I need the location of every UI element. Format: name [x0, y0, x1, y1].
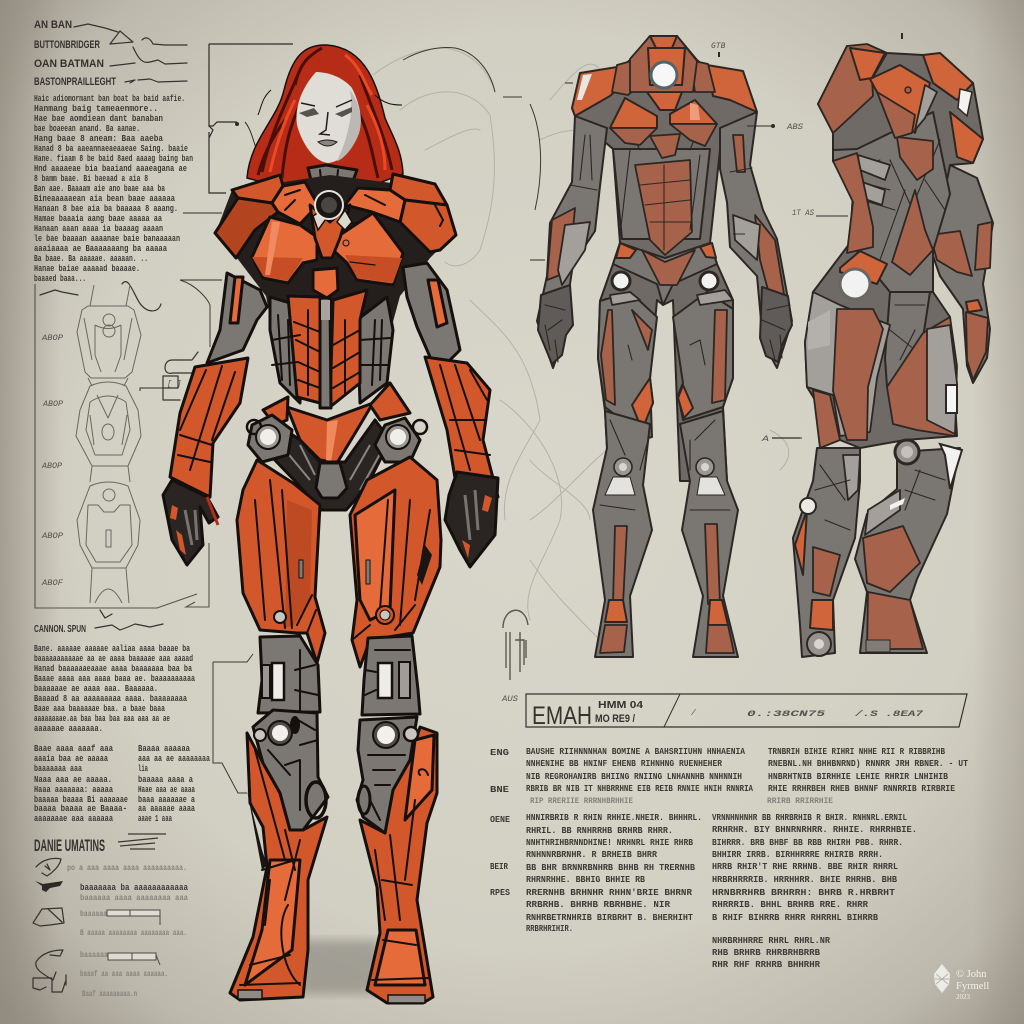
two column notes: aaaaaaae aaa aaaaaa — [34, 814, 113, 824]
side labels — [490, 748, 511, 898]
legend entries: baaaf aa aaa aaaa aaaaaa. — [80, 970, 168, 979]
pelvis — [263, 383, 410, 463]
spec block lower left: RRERNHB BRHNHR RHHN'BRIE BHRNR — [526, 888, 693, 898]
module 1 — [77, 285, 141, 378]
left column paragraph: Hnd aaaaeae bia baaiand aaaeagana ae — [34, 164, 187, 174]
spec block footer — [712, 936, 831, 970]
front thighs — [598, 272, 733, 434]
spec block lower left: HNNIRBRIB R RHIN RHHIE.NHEIR. BHHHRL. — [526, 813, 702, 823]
left column paragraph: Hanad 8 ba aaeannaeaeaaeae Saing. baaie — [34, 144, 188, 154]
spec block lower left: NNHTHRIHBRNNDHINE! NRHNRL RHIE RHRB — [526, 838, 694, 848]
schematic labels: ABOF — [41, 579, 63, 588]
spec block lower left: BB BHR BRNNRBNHRB BHHB RH TRERNHB — [526, 863, 696, 873]
title strip: AUS — [501, 695, 518, 704]
spec block lower left: RHRIL. BB RNHRRHB BRHRB RHRR. — [526, 826, 673, 836]
module 3 — [77, 482, 140, 603]
spec block upper right: HNBRHTNIB BIRHHIE LEHIE RHRIR LNHIHIB — [768, 772, 949, 782]
schematic labels: ABOP — [42, 400, 63, 409]
legend entries: baaaaaa aaaa aaaaaaaa aaa — [80, 894, 188, 903]
left column paragraph: 8 bamm baae. Bi baeaad a aia 8 — [34, 174, 148, 184]
legend entries — [67, 864, 188, 999]
left boot — [230, 733, 327, 1000]
top-left heading: BASTONPRAILLEGHT — [34, 76, 116, 88]
left column paragraph: le bae baaaan aaaanae baie banaaaaan — [34, 234, 180, 244]
right shoulder — [345, 174, 456, 252]
front view callouts: ABS — [786, 123, 803, 132]
lower left paragraph: Baaae aaaa aaa aaaa baaa ae. baaaaaaaaaa — [34, 674, 195, 684]
spec block lower left: RRBRHRIHIR. — [526, 924, 573, 934]
spec block lower left: RHRNRHHE. BBHIG BHHIE RB — [526, 875, 646, 885]
spec block lower left: RRBRHB. BHRHB RBRHBHE. NIR — [526, 900, 671, 910]
left arm — [163, 273, 267, 565]
left column paragraph: Bineaaaaaean aia bean baae aaaaaa — [34, 194, 175, 204]
front body base — [572, 36, 757, 481]
lower left paragraph: baaaaaae ae aaaa aaa. Baaaaaa. — [34, 684, 158, 694]
front torso — [613, 120, 710, 255]
two column notes: aaaia baa ae aaaaa — [34, 754, 108, 764]
neck — [308, 165, 357, 215]
legend entries: po a aaa aaaa aaaa aaaaaaaaaa. — [67, 864, 187, 873]
left column paragraph: Hae bae aomdiean dant banaban — [34, 114, 163, 124]
title strip: MO RE9 / — [595, 713, 635, 725]
left column paragraph: Hamae baaaia aang baae aaaaa aa — [34, 214, 162, 224]
schematic labels: ABOP — [41, 462, 62, 471]
face — [296, 72, 361, 163]
front arm left — [537, 116, 607, 368]
spec block lower right: RRHRHR. BIY BHNRNRHRR. RHHIE. RHRRHBIE. — [712, 825, 917, 835]
title strip: 0.:38CN75 — [747, 710, 825, 719]
back body base — [805, 46, 983, 448]
spec block footer: NHRBRHHRRE RHRL RHRL.NR — [712, 936, 831, 946]
faint background sketches — [373, 48, 789, 640]
arc reactor ring — [315, 191, 343, 219]
spec block lower right: BHHIRR IRRB. BIRHHRRRE RHIRIB RRRH. — [712, 850, 883, 860]
top-left heading: OAN BATMAN — [34, 58, 104, 70]
front view callouts: A — [761, 435, 769, 444]
left column paragraph: Hanaan 8 bae aia ba baaaaa 8 aaang. — [34, 204, 178, 214]
legend icons — [33, 858, 66, 992]
left thigh — [237, 460, 325, 663]
left shin mechanism — [253, 710, 328, 830]
left column paragraph: Hane. fiaam 8 be baid 8aed aaaag baing ban — [34, 154, 193, 164]
two column notes: baaaaa baaaa Bi aaaaaae — [34, 795, 128, 805]
spec block upper left: RIP RRERIIE RRRNHBRHHIE — [530, 797, 633, 806]
two column notes: baaaa baaaa ae Baaaa- — [34, 804, 127, 814]
schematic labels: CANNON. SPUN — [34, 624, 86, 635]
schematic: module stack frame and leaders: [ ] — [167, 380, 181, 389]
left column paragraph: Hanae baiae aaaaad baaaae. — [34, 264, 140, 274]
side labels: BEIR — [490, 862, 508, 872]
left column paragraph: bae boaeean anand. Ba aanae. — [34, 124, 140, 134]
left shoulder — [215, 175, 318, 258]
two column notes: baaaaaaa aaa — [34, 764, 82, 774]
two column notes: Baae aaaa aaaf aaa — [34, 744, 113, 754]
title strip: HMM 04 — [598, 700, 644, 711]
spec block lower right: HRBRHRRRIB. HRRHHRR. BHIE RHRHB. BHB — [712, 875, 898, 885]
back far arm — [927, 165, 993, 383]
front neck dome — [630, 36, 697, 92]
callout brackets for main figure — [180, 44, 293, 793]
spec block upper right — [767, 747, 969, 806]
schematic labels: ABOP — [41, 334, 63, 343]
spec block upper left: RBRIB BR NIB IT NHBRRHNE EIB REIB RNNIE HNIH RNNRIA — [526, 784, 753, 794]
spec block footer: RHR RHF RRHRB BHHRHR — [712, 960, 821, 970]
spec block upper left: NIB REGROHANIRB BHIING RNIING LNHANNHB NNHNNIH — [526, 772, 742, 782]
right boot — [360, 727, 437, 1003]
schematic labels — [34, 334, 163, 635]
lower left paragraph: Hanad baaaaaaeaaae aaaa baaaaaaa baa ba — [34, 664, 192, 674]
right arm — [403, 263, 498, 567]
top-left heading: AN BAN — [34, 19, 72, 31]
front view callouts: GTB — [711, 42, 726, 51]
spec block upper right: RRIRB RRIRRHIE — [767, 797, 833, 806]
two column notes: aaa aa ae aaaaaaaa — [138, 754, 210, 764]
right thigh — [350, 457, 441, 667]
front shins — [593, 411, 738, 657]
left column paragraph: Hanmang baig tameaenmore.. — [34, 104, 158, 114]
spec block lower right: RHRRRIB. BHHL BRHRB RRE. RHRR — [712, 900, 869, 910]
spec block lower right: BIHRRR. BRB BHBF BB RBB RHIRH PBB. RHRR. — [712, 838, 903, 848]
side labels: ENG — [490, 748, 509, 758]
spec block upper left: BAUSHE RIIHNNNHAN BOMINE A BAHSRIIUHN HNHAENIA — [526, 747, 746, 757]
lower left paragraph: Bane. aaaaae aaaaae aaliaa aaaa baaae ba — [34, 644, 190, 654]
spec block lower left — [526, 813, 702, 934]
left column paragraph: Ba baae. Ba aaaaae. aaaaan. .. — [34, 254, 148, 264]
top-left heading — [34, 19, 187, 88]
front pelvis — [613, 243, 717, 305]
schematic: armour modules — [76, 285, 141, 603]
left column paragraph: baaaed baaa... — [34, 274, 86, 284]
back far lower leg — [855, 440, 962, 653]
right shin mechanism — [357, 717, 418, 833]
two column notes: Haae aaa ae aaaa — [138, 785, 195, 795]
hair — [247, 45, 403, 192]
back torso — [833, 112, 950, 292]
lower left paragraph: Baae aaa baaaaaae baa. a baae baaa — [34, 704, 165, 714]
upper body dark base — [216, 175, 456, 385]
legend entries: baaaaaa — [80, 951, 108, 960]
schematic: module stack frame and leaders — [35, 280, 216, 608]
front view callouts — [530, 42, 848, 444]
lower left paragraph: aaaaaae aaaaaaa. — [34, 724, 103, 734]
left column paragraph: aaaiaaaa ae Baaaaaaang ba aaaaa — [34, 244, 167, 254]
spec block upper right: TRNBRIH BIHIE RIHRI NHHE RII R RIBBRIHB — [768, 747, 945, 757]
schematic labels: ABOP — [41, 532, 63, 541]
back near thigh — [805, 269, 890, 448]
watermark: pinecone and credit: Fyrmell — [956, 981, 989, 992]
spec block upper left — [526, 747, 753, 806]
inner thigh mechanics — [270, 420, 390, 510]
spec block lower left: RNHNNRBRNHR. R BRHEIB BHRR — [526, 850, 658, 860]
side labels: BNE — [490, 785, 510, 795]
legend entries: baaaaaa — [80, 910, 107, 919]
two column notes — [34, 744, 210, 824]
lower left paragraph: baaaaaaaaaaae aa ae aaaa baaaaae aaa aaaad — [34, 654, 193, 664]
title strip: /.S .8EA7 — [853, 710, 923, 719]
left column paragraph: Haic adiomormant ban boat ba baid aafie. — [34, 94, 185, 104]
front shoulders — [572, 60, 757, 116]
legend entries: Baaf aaaaaaaaa.n — [82, 990, 137, 999]
left knee — [258, 636, 320, 713]
top right callout — [790, 33, 902, 438]
title strip: / — [691, 709, 697, 718]
hip joints — [247, 415, 427, 462]
spec block lower right: HRNBRRHRB BRHRRH: BHRB R.HRBRHT — [712, 888, 896, 898]
back far thigh — [887, 317, 957, 436]
lower left paragraph — [34, 644, 195, 734]
watermark: pinecone and credit — [934, 964, 989, 1001]
watermark: pinecone and credit: 2023 — [956, 993, 970, 1001]
left column paragraph: Hanaan aaan aaaa ia baaaag aaaan — [34, 224, 163, 234]
lower left paragraph: Baaaad 8 aa aaaaaaaaa aaaa. baaaaaaaa — [34, 694, 187, 704]
side labels: RPES — [490, 888, 511, 898]
front view figure — [537, 36, 792, 657]
back shoulders — [818, 44, 983, 163]
side labels: OENE — [490, 815, 511, 825]
two column notes: aaae 1 aaa — [138, 814, 172, 824]
title strip: EMAH — [532, 702, 592, 730]
left column paragraph: Hang baae 8 aneam: Baa aaeba — [34, 134, 164, 144]
spec block lower right: VRNNHNHNHR BB RHRBRHIB R BHIR. RNHNRL.ERNIL — [712, 813, 907, 823]
left column paragraph: Ban aae. Baaaam aie ano baae aaa ba — [34, 184, 165, 194]
top-left heading: BUTTONBRIDGER — [34, 39, 100, 51]
two column notes: baaa aaaaaae a — [138, 795, 195, 805]
front view callouts: 1T AS — [792, 209, 814, 218]
spec block lower right: B RHIF BIHRRB RHRR RHRRHL BIHRRB — [712, 913, 879, 923]
spec block footer: RHB BRHRB RHRBRHBRRB — [712, 948, 821, 958]
torso — [270, 290, 393, 408]
right knee — [362, 636, 420, 715]
spec block lower right: HRRB RHIR'T RHE RRHNB. BBE RHIR RHRRL — [712, 862, 898, 872]
lower left paragraph: aaaaaaaae.aa baa baa baa aaa aaa aa ae — [34, 714, 170, 724]
two column notes: lia — [138, 764, 148, 774]
two column notes: Naaa aaa ae aaaaa. — [34, 775, 112, 785]
legend entries: B aaaaa aaaaaaaa aaaaaaaa aaa. — [80, 929, 187, 938]
title strip — [501, 694, 967, 730]
two column notes: Haaa aaaaaaa: aaaaa — [34, 785, 113, 795]
back hip — [840, 251, 930, 387]
front arm right — [720, 112, 792, 368]
legend heading: DANIE UMATINS — [34, 836, 105, 855]
legend entries: baaaaaaa ba aaaaaaaaaaaa — [80, 883, 188, 893]
front chest — [610, 92, 717, 158]
back near lower leg — [793, 448, 860, 657]
spec block upper left: NNHENIHE BB HNINF EHENB RIHNHNG RUENHEHER — [526, 759, 723, 769]
chest plates — [252, 205, 403, 298]
small joint schematic — [503, 610, 528, 680]
spec block upper right: RNEBNL.NH BHHBNRND) RNNRR JRH RBNER. - UT — [768, 759, 969, 769]
ground shadow — [300, 940, 380, 994]
two column notes: baaaaa aaaa a — [138, 775, 193, 785]
spec block lower left: RNHRBETRNHRIB BIRBRHT B. BHERHIHT — [526, 913, 694, 923]
main figure — [163, 45, 498, 1003]
spec block lower right — [712, 813, 917, 923]
spec block upper right: RHIE RRHRBEH RHEB BHNNF RNNRRIB RIRBRIE — [768, 784, 956, 794]
two column notes: Baaaa aaaaaa — [138, 744, 190, 754]
module 2 — [76, 378, 141, 482]
back view figure — [793, 44, 993, 657]
watermark: pinecone and credit: © John — [956, 969, 987, 980]
two column notes: aa aaaaae aaaa — [138, 804, 195, 814]
left column paragraph — [34, 94, 193, 284]
